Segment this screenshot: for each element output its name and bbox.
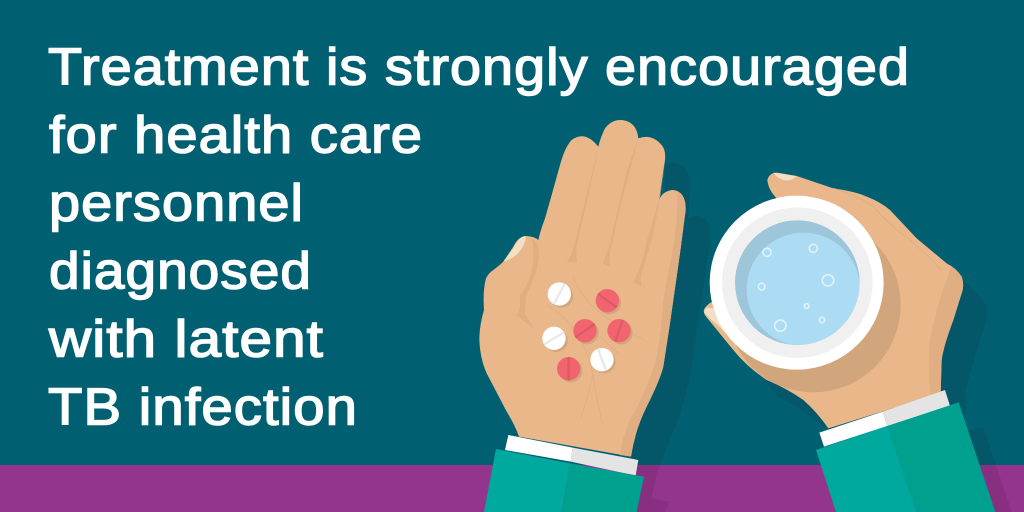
thumbnail xyxy=(503,236,526,262)
title: with latent xyxy=(48,310,324,368)
cuff xyxy=(819,412,887,447)
finger creases xyxy=(517,138,665,330)
title: diagnosed xyxy=(49,242,312,300)
water shadow xyxy=(735,220,860,345)
bubbles xyxy=(758,244,834,331)
left sleeve xyxy=(484,435,644,512)
right hand with water glass xyxy=(704,173,1012,512)
glass rim xyxy=(710,196,884,370)
red pills xyxy=(557,289,631,380)
title: TB infection xyxy=(48,378,358,436)
hand shadow xyxy=(630,163,710,512)
cup shadow on hand xyxy=(736,242,900,392)
left hand with pills xyxy=(479,120,710,512)
fingernail xyxy=(704,307,726,333)
hand xyxy=(704,173,963,428)
hand side shade xyxy=(929,267,963,396)
water surface xyxy=(747,233,860,346)
right sleeve xyxy=(816,390,995,512)
title: Treatment is strongly encouraged xyxy=(48,38,910,96)
palm lines xyxy=(547,277,647,423)
cuff xyxy=(505,435,573,462)
purple band xyxy=(0,465,1024,512)
title xyxy=(48,38,910,436)
pill score lines xyxy=(544,284,623,380)
pills xyxy=(542,282,633,382)
sleeve shadow xyxy=(968,428,1012,512)
pill shadows xyxy=(544,284,633,382)
white pills xyxy=(542,282,614,371)
hand shadow xyxy=(765,282,987,427)
glass inner wall xyxy=(722,207,873,358)
title: personnel xyxy=(49,174,304,232)
knuckle line xyxy=(833,188,942,271)
title: for health care xyxy=(49,106,423,164)
jacket sleeve xyxy=(816,426,917,512)
right edge shade xyxy=(620,192,686,457)
thumbnail xyxy=(773,173,797,180)
palm and fingers xyxy=(479,120,686,457)
jacket sleeve xyxy=(484,449,570,512)
